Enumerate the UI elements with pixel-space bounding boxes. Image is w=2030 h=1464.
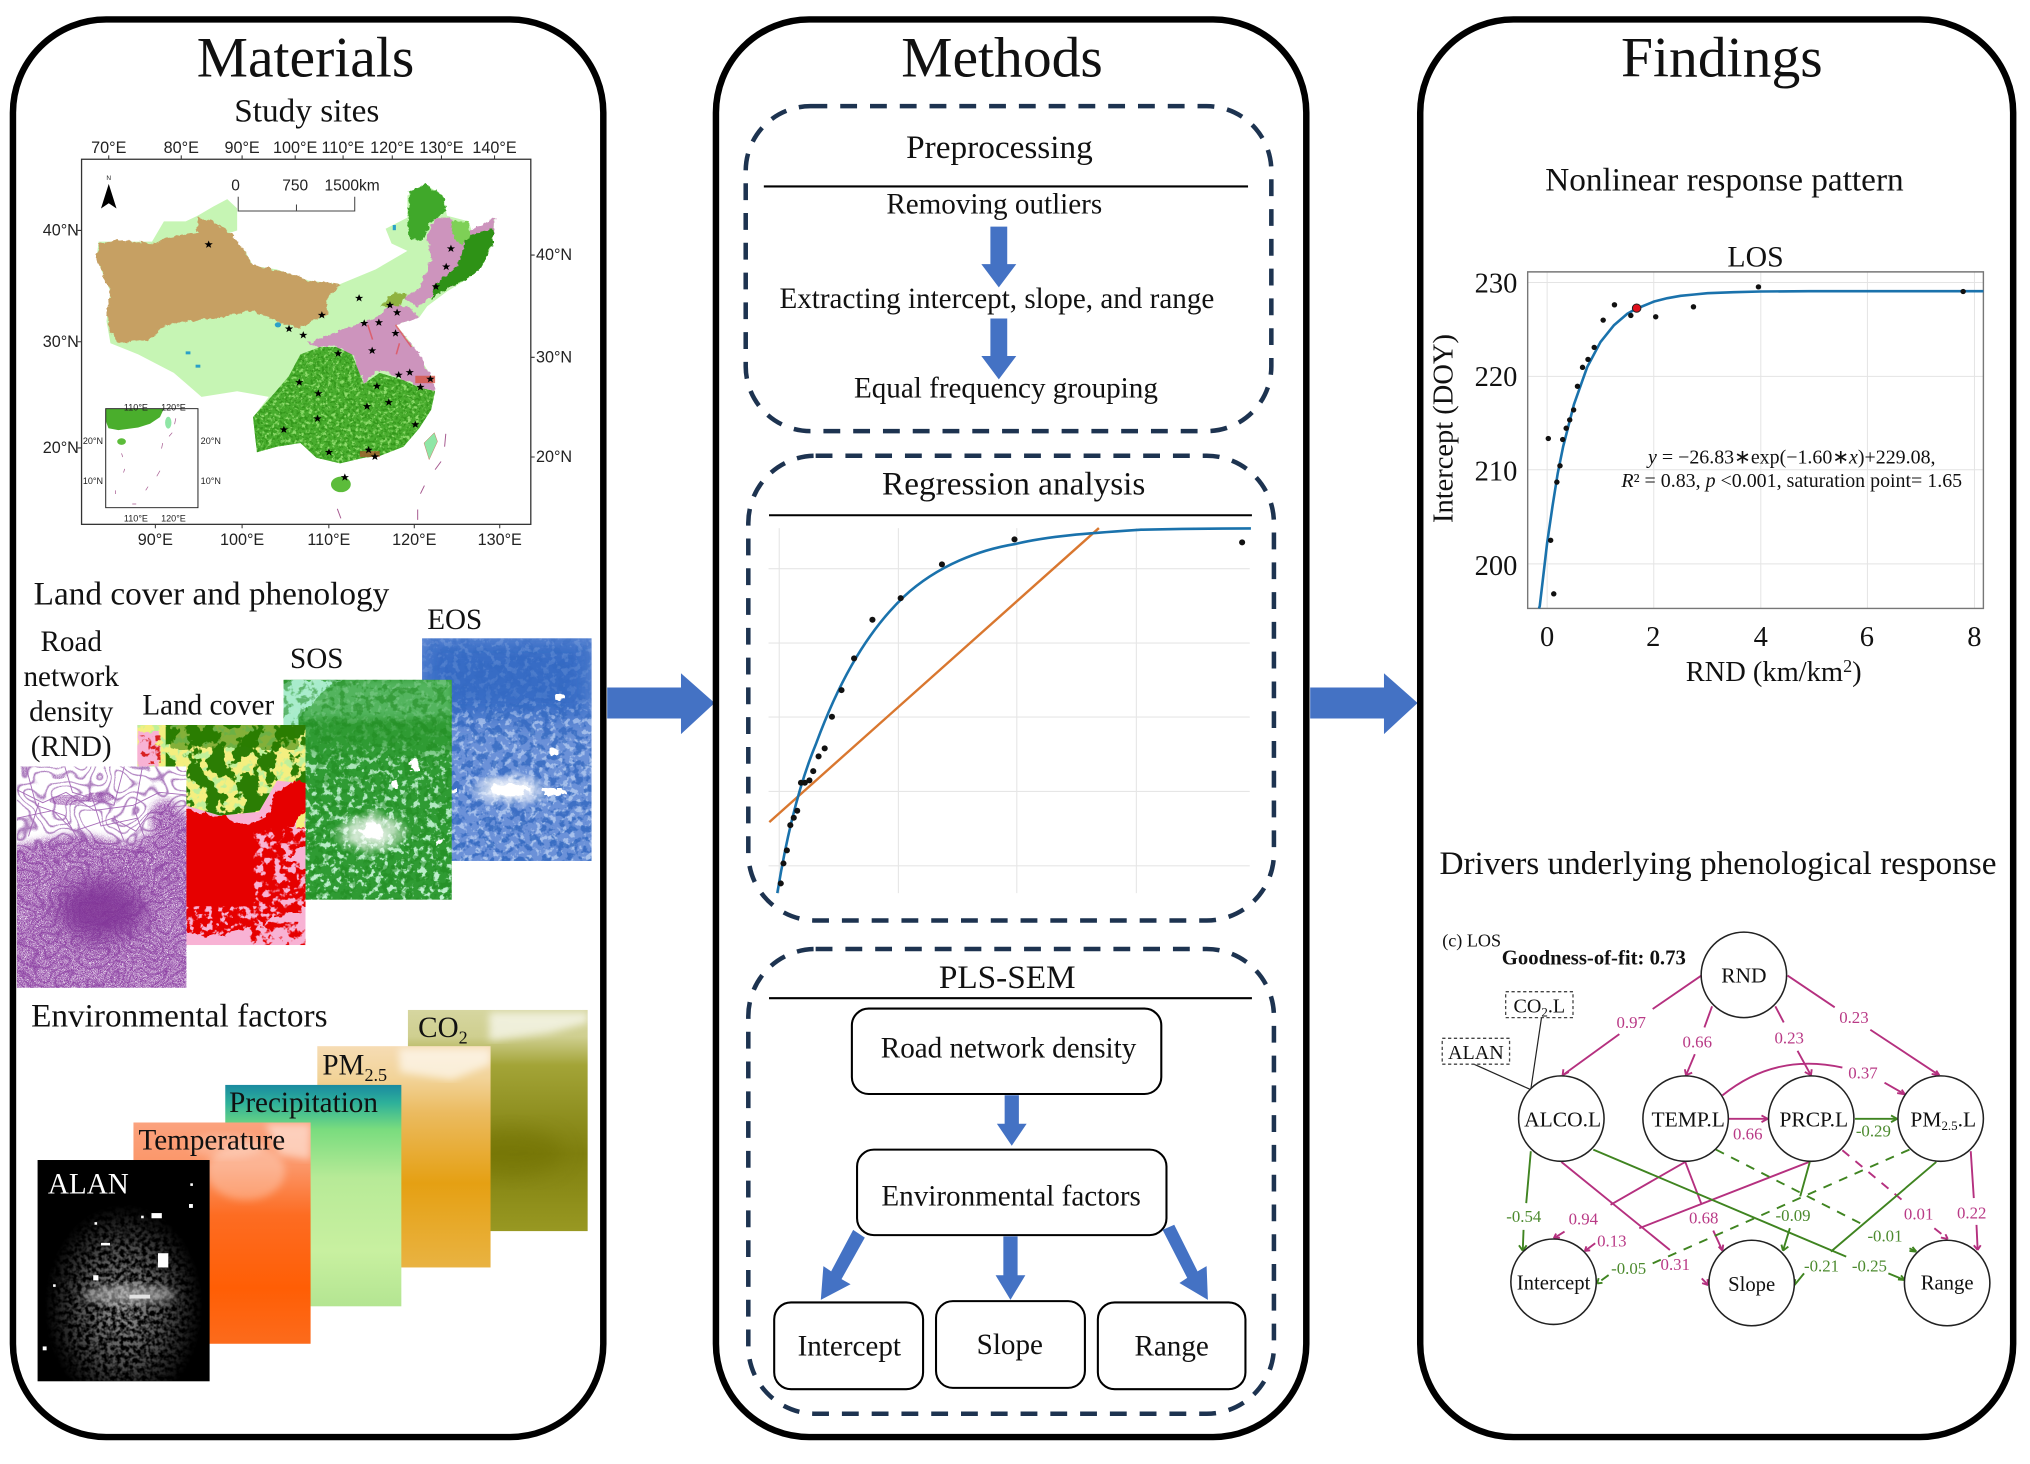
arrow: to slope [996,1236,1025,1300]
diagram: PLS-SEM path model [1442,930,1990,1326]
map layer: precipitation [225,1085,401,1306]
label: CO2: CO [418,1012,459,1044]
map layer: CO2 [408,1010,588,1231]
chart: LOS intercept vs RND: LOS [1727,241,1784,274]
scale bar: 750 [282,177,308,194]
icon: north arrow [101,175,117,208]
node: PRCP.L: PRCP.L [1779,1107,1848,1131]
chart: LOS intercept vs RND: 0 [1540,622,1554,653]
map: study sites across China: 110°E [322,139,365,157]
path coefficients: 0.66 [1683,1032,1712,1051]
map: study sites across China: 140°E [472,139,517,157]
chart: LOS intercept vs RND: RND (km/km [1686,657,1843,688]
node: Range: Range [1921,1272,1974,1294]
saturation point [1632,304,1641,312]
map: study sites across China: 80°E [164,139,199,157]
inset map labels: 110°E [124,514,148,524]
study site stars [204,241,455,481]
chart: LOS intercept vs RND: 220 [1475,362,1517,393]
box: intercept [774,1302,923,1389]
inset map labels: 120°E [161,514,186,524]
path coefficients: 0.13 [1597,1232,1627,1251]
panel: PLS-SEM [748,949,1274,1414]
title: Findings: Findings [1621,26,1823,89]
input box: CO2.L: 2 [1541,1004,1548,1019]
equation: y = −26.83∗exp(−1.60∗x)+229.08, [1646,446,1936,468]
map: study sites across China: 120°E [370,139,415,157]
path coefficients: 0.97 [1617,1013,1646,1032]
node: Intercept [1511,1239,1596,1324]
node: TEMP.L [1643,1076,1728,1161]
map: study sites across China: 100°E [220,531,264,549]
heading: study sites: Study sites [234,93,379,130]
map: study sites across China: 110°E [307,531,351,549]
input box: CO2.L: .L [1548,995,1565,1017]
node: Slope [1709,1240,1794,1326]
path coefficients: 0.66 [1733,1124,1762,1143]
node: PM2.5.L: .L [1958,1107,1976,1131]
equation [1620,446,1962,492]
chart: LOS intercept vs RND: 2 [1843,656,1852,676]
chart: LOS intercept vs RND: 200 [1475,551,1517,582]
input box: CO2.L [1506,992,1573,1019]
label: road network density: density [29,696,114,728]
node: Range [1904,1240,1990,1326]
path coefficients: -0.25 [1852,1256,1887,1275]
panel: preprocessing [746,106,1271,431]
input box: CO2.L: CO [1514,995,1541,1017]
chart: LOS intercept vs RND: 8 [1967,622,1981,653]
label: SOS: SOS [290,643,343,675]
box: road network density: Road network density [881,1033,1137,1065]
arrow: methods to findings [1310,673,1418,734]
step: extracting values: Extracting intercept, slope, and range [779,283,1214,315]
panel: findings [1420,19,2013,1437]
path coefficients: -0.29 [1856,1122,1891,1141]
arrow: down [981,318,1016,379]
chart: LOS intercept vs RND: ) [1852,657,1862,688]
chart: LOS intercept vs RND: 6 [1860,622,1874,653]
panel: methods [716,19,1306,1437]
heading: regression analysis: Regression analysis [882,466,1145,503]
heading: environmental factors: Environmental factors [31,998,328,1035]
node: Slope: Slope [1728,1274,1775,1296]
map: study sites across China: 70°E [91,139,127,157]
label: land cover: Land cover [142,690,274,722]
map: study sites across China: 20°N [43,439,79,457]
diagram: PLS-SEM path model: Goodness-of-fit: 0.73 [1502,948,1686,970]
label: ALAN: ALAN [48,1169,129,1201]
path coefficients: -0.05 [1611,1259,1646,1278]
path coefficients: 0.22 [1957,1203,1986,1222]
chart: LOS intercept vs RND: 210 [1475,456,1517,487]
path coefficients: 0.01 [1904,1205,1933,1224]
path coefficients: 0.37 [1848,1063,1878,1082]
path coefficients: 0.31 [1661,1255,1690,1274]
node: TEMP.L: TEMP.L [1652,1107,1725,1131]
box: range: Range [1134,1331,1209,1363]
node: PRCP.L [1768,1076,1854,1161]
map layer: PM2.5 [317,1046,491,1267]
title: Methods: Methods [901,26,1103,89]
inset map labels [83,402,221,524]
land cover map of China [97,184,494,520]
arrow: down [997,1095,1027,1146]
inset map labels: 10°N [201,476,221,486]
node: Intercept: Intercept [1517,1272,1591,1294]
inset map labels: 20°N [83,436,103,446]
label: road network density: (RND) [31,731,112,763]
arrow: to intercept [821,1230,865,1300]
map layer: SOS [284,680,452,900]
arrow: down [981,227,1016,287]
map layer: land cover [137,722,311,945]
inset map labels: 120°E [161,402,186,412]
map layer: ALAN [38,1160,210,1381]
node: RND [1701,932,1787,1018]
path coefficients: 0.23 [1774,1028,1804,1047]
map: study sites across China: 100°E [273,139,318,157]
map: study sites across China [43,139,572,549]
label: road network density: network [24,661,119,693]
chart: LOS intercept vs RND: Intercept (DOY) [1429,334,1460,523]
title: Materials: Materials [197,26,414,89]
box: road network density [852,1009,1161,1094]
panel: regression analysis [748,456,1274,920]
arrow: materials to methods [607,673,715,734]
inset map labels: 10°N [83,476,103,486]
chart: LOS intercept vs RND: 2 [1646,622,1660,653]
label: EOS: EOS [427,604,482,636]
path coefficients: 0.23 [1839,1008,1869,1027]
map: study sites across China: 90°E [138,531,173,549]
map: study sites across China: 20°N [536,448,572,466]
map layer: road network density [17,766,186,988]
label: road network density [24,626,119,763]
step: grouping: Equal frequency grouping [854,372,1158,404]
map: study sites across China: 130°E [419,139,464,157]
node: ALCO.L [1519,1076,1604,1161]
step: removing outliers: Removing outliers [886,189,1102,221]
path coefficients: 0.68 [1689,1208,1718,1227]
map: study sites across China: 40°N [43,222,79,240]
box: environmental factors [857,1150,1166,1235]
path coefficients: -0.21 [1804,1256,1839,1275]
panel: materials [13,19,603,1437]
map: study sites across China: 30°N [536,349,572,367]
box: range [1098,1302,1245,1389]
path coefficients: 0.94 [1569,1210,1599,1229]
equation: R² = 0.83, p <0.001, saturation point= 1.65 [1620,470,1962,492]
scale bar: 1500km [325,177,380,194]
map: study sites across China: 30°N [43,333,79,351]
inset map labels: 20°N [201,436,221,446]
arrow: to range [1163,1225,1208,1300]
box: slope: Slope [977,1329,1043,1361]
node: PM2.5.L [1898,1076,1983,1161]
map: study sites across China: 130°E [478,531,522,549]
box: slope [936,1301,1085,1388]
edges [1473,976,1981,1285]
map: study sites across China: 90°E [224,139,260,157]
node: PM2.5.L: PM [1910,1107,1941,1131]
label: temperature: Temperature [139,1125,285,1157]
icon: north arrow: N [106,175,111,182]
map: study sites across China: 120°E [392,531,437,549]
map layer: EOS [422,638,592,861]
input box: ALAN: ALAN [1448,1042,1504,1064]
label: precipitation: Precipitation [229,1087,378,1119]
node: PM2.5.L: 2.5 [1941,1118,1958,1133]
diagram: PLS-SEM path model: (c) LOS [1442,930,1501,951]
chart: LOS intercept vs RND [1429,241,1983,688]
path coefficients: -0.54 [1506,1207,1542,1226]
scale bar [231,177,380,211]
box: intercept: Intercept [798,1331,901,1363]
chart: regression curves [769,528,1251,893]
label: CO2: 2 [459,1027,468,1047]
heading: nonlinear response pattern: Nonlinear response pattern [1545,161,1904,198]
path coefficients: -0.01 [1867,1227,1903,1246]
node: ALCO.L: ALCO.L [1524,1107,1601,1131]
heading: preprocessing: Preprocessing [906,129,1093,166]
chart: LOS intercept vs RND: 230 [1475,269,1517,300]
inset map: South China Sea [106,409,198,508]
heading: PLS-SEM: PLS-SEM [939,959,1076,996]
label: PM2.5: 2.5 [364,1065,387,1085]
heading: land cover and phenology: Land cover and phenology [34,576,390,613]
scale bar: 0 [231,177,240,194]
inset map labels: 110°E [124,402,148,412]
node: RND: RND [1721,964,1767,988]
label: PM2.5: PM [322,1050,364,1082]
chart: LOS intercept vs RND: 4 [1754,622,1768,653]
box: environmental factors: Environmental factors [881,1180,1141,1212]
path coefficients: -0.09 [1776,1206,1811,1225]
path coefficients [1506,1008,1986,1278]
map layer: temperature [133,1122,311,1344]
map: study sites across China: 40°N [536,246,572,264]
label: road network density: Road [40,626,102,658]
heading: drivers: Drivers underlying phenological response [1439,845,1997,882]
